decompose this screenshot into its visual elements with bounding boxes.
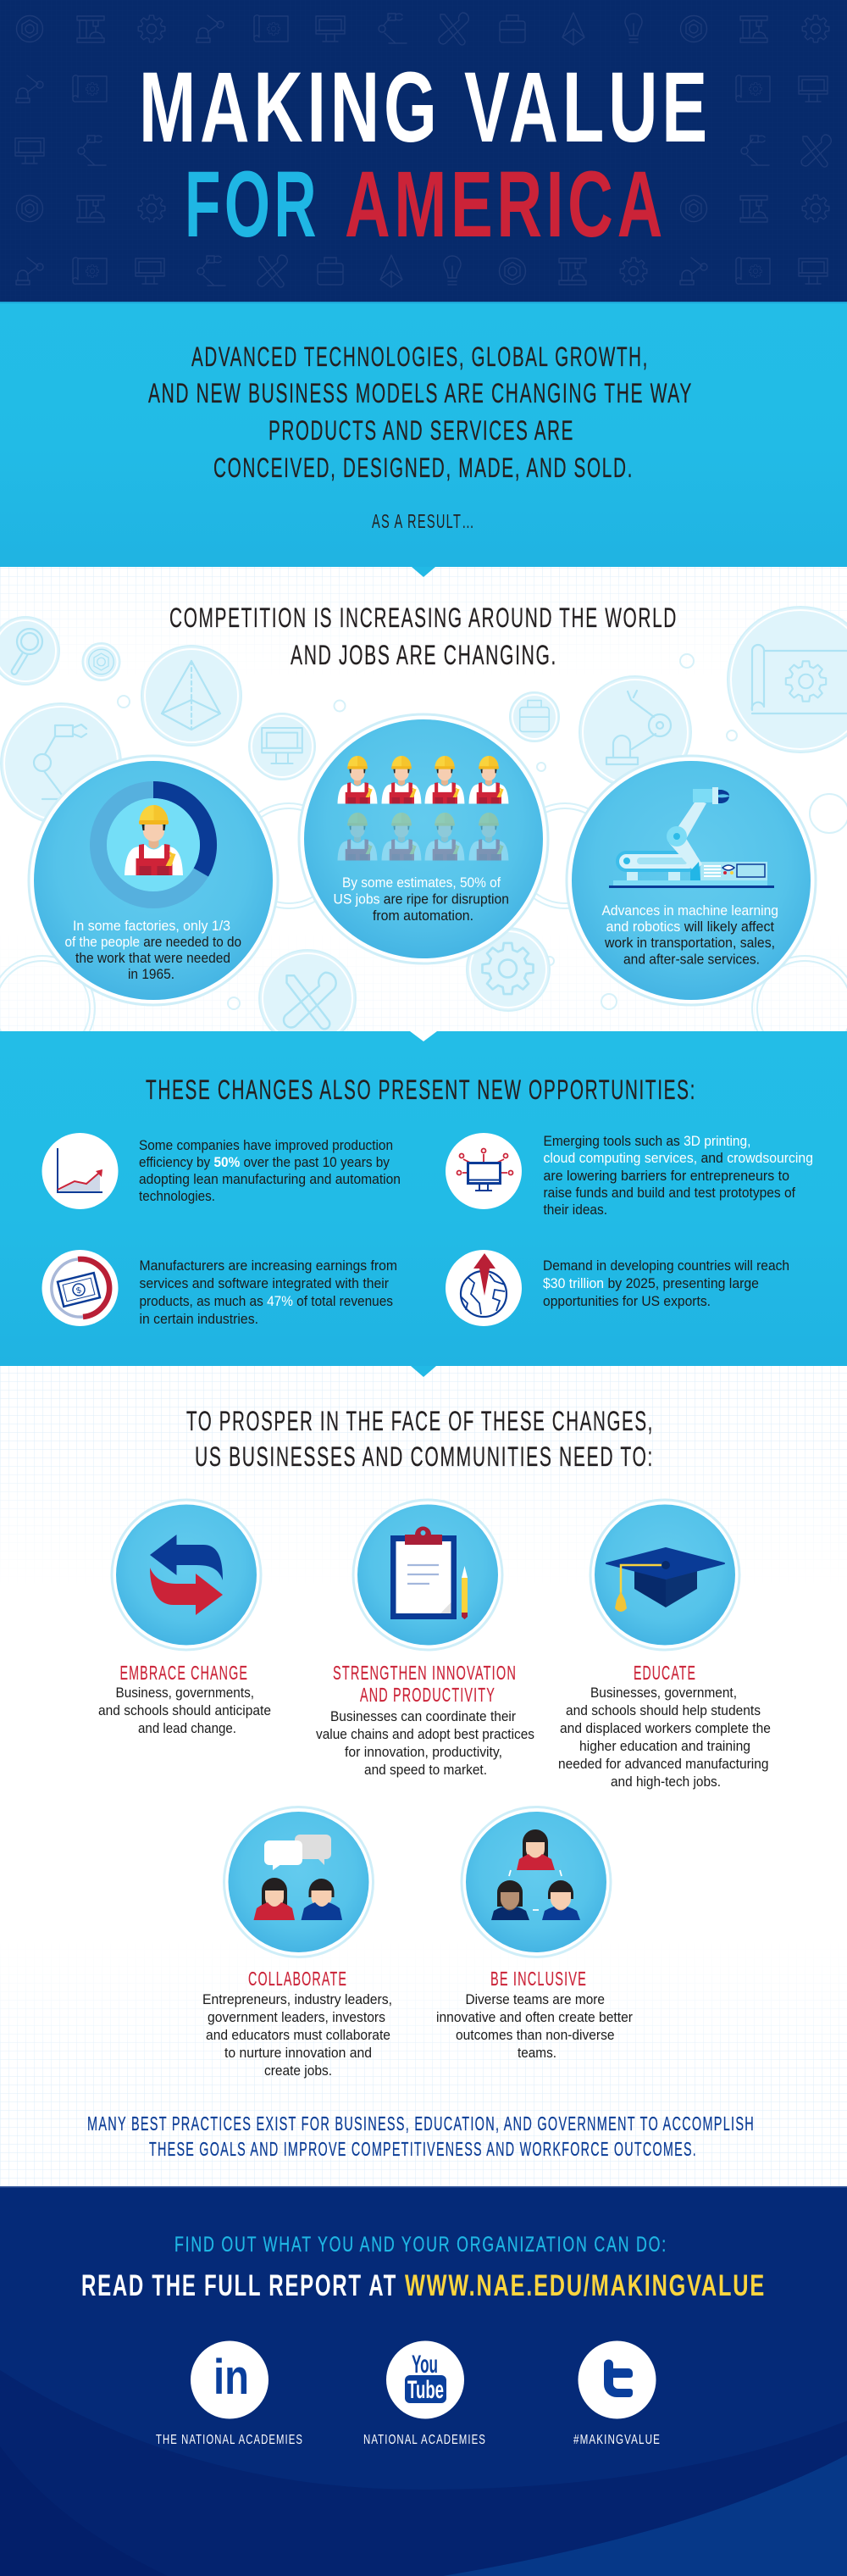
description: Business, governments, — [115, 1685, 254, 1701]
text: efficiency: adopting lean manufacturing and automation — [139, 1172, 401, 1187]
text: earnings — [139, 1258, 397, 1327]
description — [202, 1992, 392, 2079]
text: machine learning: and after-sale services. — [623, 952, 760, 968]
label: EDUCATE — [634, 1662, 696, 1684]
text: emerging tools: are lowering barriers for entrepreneurs to — [544, 1169, 789, 1184]
card: collaborate — [202, 1807, 392, 2079]
description: and high-tech jobs. — [611, 1774, 721, 1790]
icon: pyramid — [162, 661, 220, 730]
description: and schools should help students — [566, 1703, 761, 1718]
icon: claw arm — [34, 724, 86, 799]
panel: prosper background — [0, 1366, 847, 2186]
text: factories: of the people are needed to do — [64, 935, 241, 950]
description: Businesses can coordinate their — [330, 1709, 516, 1724]
as a result: AS A RESULT… — [372, 510, 475, 532]
text: emerging tools — [544, 1134, 813, 1218]
text: earnings: services and software integrated with their — [139, 1276, 389, 1291]
label — [333, 1662, 517, 1706]
report link: READ THE FULL REPORT AT — [81, 2269, 397, 2302]
description: and schools should anticipate — [98, 1703, 271, 1718]
description: value chains and adopt best practices — [316, 1727, 534, 1742]
icon: money ring — [42, 1250, 119, 1326]
panel: intro — [0, 302, 847, 567]
title — [139, 52, 711, 257]
text: machine learning: and robotics will likely affect — [606, 919, 774, 935]
text: emerging tools: their ideas. — [544, 1202, 607, 1218]
icon: youtube: You — [412, 2351, 438, 2379]
description: needed for advanced manufacturing — [558, 1757, 769, 1772]
social labels: NATIONAL ACADEMIES — [363, 2433, 486, 2447]
competition heading: AND JOBS ARE CHANGING. — [291, 640, 557, 670]
icon: briefcase — [520, 701, 549, 731]
description: teams. — [518, 2046, 556, 2061]
text: factories: the work that were needed — [75, 951, 230, 966]
label: BE INCLUSIVE — [490, 1968, 587, 1990]
report link — [81, 2269, 766, 2302]
icon: networked monitor — [446, 1133, 522, 1209]
icon: twitter — [578, 2340, 656, 2418]
description: outcomes than non-diverse — [456, 2028, 615, 2043]
social labels — [156, 2433, 661, 2447]
icon: blueprint — [752, 645, 847, 713]
panel: opportunities — [0, 1031, 847, 1366]
competition heading — [169, 602, 678, 670]
icon: robot assembly — [609, 787, 774, 888]
text: jobs: By some estimates, 50% of — [342, 875, 501, 891]
panel: one third worker — [29, 756, 278, 1005]
text: emerging tools: raise funds and build and test prototypes of — [544, 1185, 795, 1201]
text: jobs: from automation. — [373, 908, 473, 924]
icon: youtube: Tube — [407, 2376, 444, 2404]
description: and displaced workers complete the — [560, 1721, 771, 1736]
description: and lead change. — [138, 1721, 236, 1736]
closing statement — [87, 2112, 755, 2160]
icon: wrench and screwdriver — [284, 973, 336, 1029]
icon: two people talking — [254, 1835, 342, 1920]
header banner — [0, 0, 847, 302]
card: educate — [558, 1500, 771, 1790]
text: demand: opportunities for US exports. — [543, 1294, 711, 1309]
description: innovative and often create better — [436, 2010, 633, 2025]
icon: gear — [482, 943, 534, 994]
panel: competition background — [0, 567, 847, 1031]
text: efficiency: efficiency by 50% over the past 10 years by — [139, 1155, 390, 1170]
text: jobs — [334, 875, 509, 924]
panel: machine learning — [567, 756, 816, 1005]
intro text: PRODUCTS AND SERVICES ARE — [268, 415, 574, 446]
description — [436, 1992, 633, 2061]
icon: swap arrows — [150, 1535, 223, 1615]
intro text: CONCEIVED, DESIGNED, MADE, AND SOLD. — [213, 452, 634, 483]
text: efficiency — [139, 1138, 401, 1204]
prosper heading — [186, 1406, 654, 1472]
text: emerging tools: cloud computing services, and crowdsourcing — [544, 1151, 813, 1166]
bubble icons — [12, 629, 847, 1029]
icon: linkedin: in — [213, 2350, 249, 2405]
text: emerging tools: Emerging tools such as 3D printing, — [544, 1134, 750, 1149]
text: factories: In some factories, only 1/3 — [73, 919, 230, 934]
description: Diverse teams are more — [466, 1992, 605, 2007]
text: demand — [543, 1258, 789, 1309]
label: AND PRODUCTIVITY — [360, 1684, 495, 1706]
icon: hex nut — [89, 649, 113, 675]
text: machine learning: Advances in machine learning — [601, 903, 778, 919]
text: efficiency: technologies. — [139, 1189, 215, 1204]
icon: growth chart — [42, 1133, 119, 1209]
icon: graduation cap — [606, 1548, 724, 1612]
icon: monitor — [262, 728, 302, 763]
call to action: FIND OUT WHAT YOU AND YOUR ORGANIZATION CAN DO: — [174, 2233, 667, 2257]
text: demand: $30 trillion by 2025, presenting large — [543, 1276, 759, 1291]
text: demand: Demand in developing countries will reach — [543, 1258, 789, 1274]
social labels: THE NATIONAL ACADEMIES — [156, 2433, 303, 2447]
icon: youtube — [386, 2340, 464, 2418]
description: create jobs. — [264, 2063, 332, 2079]
icon: three people — [491, 1829, 580, 1920]
icon: workers row faded — [338, 813, 508, 860]
label: EMBRACE CHANGE — [120, 1662, 248, 1684]
icon: magnifier — [12, 629, 42, 675]
card: embrace change — [98, 1500, 271, 1736]
text: jobs: US jobs are ripe for disruption — [334, 891, 509, 907]
text: earnings: products, as much as 47% of total revenues — [139, 1294, 393, 1309]
text: machine learning — [601, 903, 778, 968]
icon: workers row kept — [338, 756, 508, 803]
description — [98, 1685, 271, 1736]
chart: one third donut — [98, 781, 217, 900]
text: efficiency: Some companies have improved production — [139, 1138, 393, 1153]
description: and speed to market. — [364, 1763, 487, 1778]
decorative tech icon bubbles — [0, 607, 847, 1061]
text: earnings: Manufacturers are increasing earnings from — [139, 1258, 397, 1274]
icon: robot arm — [606, 691, 671, 764]
social labels: #MAKINGVALUE — [573, 2433, 661, 2447]
label: STRENGTHEN INNOVATION — [333, 1662, 517, 1684]
title: AMERICA — [345, 153, 667, 257]
description: Entrepreneurs, industry leaders, — [202, 1992, 392, 2007]
icon: clipboard and pencil — [390, 1527, 468, 1619]
description: Businesses, government, — [590, 1685, 737, 1701]
header icon pattern — [15, 13, 831, 287]
title: FOR — [185, 153, 320, 257]
description: and educators must collaborate — [206, 2028, 390, 2043]
card: be inclusive — [436, 1807, 633, 2061]
text: earnings: in certain industries. — [139, 1312, 258, 1327]
description — [316, 1709, 534, 1778]
label: COLLABORATE — [248, 1968, 347, 1990]
description — [558, 1685, 771, 1790]
icon: globe and arrow — [446, 1250, 522, 1326]
description: to nurture innovation and — [224, 2046, 372, 2061]
card: strengthen innovation — [316, 1500, 534, 1778]
footer — [0, 2186, 847, 2576]
icon: linkedin — [191, 2340, 268, 2418]
description: government leaders, investors — [208, 2010, 385, 2025]
text: factories — [64, 919, 241, 982]
intro text — [148, 341, 693, 483]
panel: half of jobs — [299, 714, 548, 963]
icon: money ring: $ — [75, 1285, 83, 1296]
description: for innovation, productivity, — [345, 1745, 502, 1760]
text: factories: in 1965. — [128, 967, 174, 982]
description: higher education and training — [579, 1739, 750, 1754]
text: machine learning: work in transportation, sales, — [604, 935, 775, 951]
